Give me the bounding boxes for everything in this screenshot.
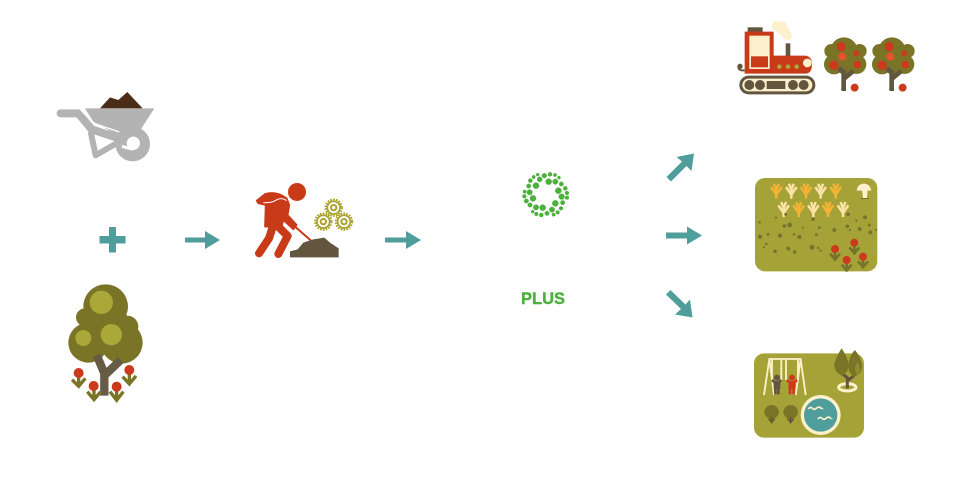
arrow: ingredients to worker [185, 231, 220, 249]
large tree [834, 348, 862, 391]
panel: park with swings, trees and pond [754, 348, 864, 438]
soil dots [758, 213, 877, 254]
swing set [764, 359, 806, 395]
pond [801, 395, 841, 435]
arrow: right [666, 226, 702, 244]
small trees [764, 405, 798, 424]
icon: green dot ring [522, 172, 569, 217]
icon: plus sign [100, 227, 126, 252]
fruit tree 2 [872, 37, 915, 92]
arrow: worker to outputs [385, 231, 421, 249]
icon: tree with flowers [68, 284, 143, 400]
label: PLUS: PLUS [521, 290, 565, 308]
tractor [737, 21, 815, 94]
fruit tree 1 [824, 37, 867, 92]
arrow: down right [666, 290, 692, 318]
flowers [830, 245, 868, 271]
arrow: up right [666, 154, 694, 182]
icon: worker digging with gears [257, 183, 352, 257]
icon: wheelbarrow with soil [61, 92, 154, 161]
mushroom [857, 184, 871, 199]
crops [771, 184, 848, 217]
panel: field with crops, soil and flowers [755, 178, 877, 271]
icon: tractor and fruit trees [737, 21, 915, 94]
